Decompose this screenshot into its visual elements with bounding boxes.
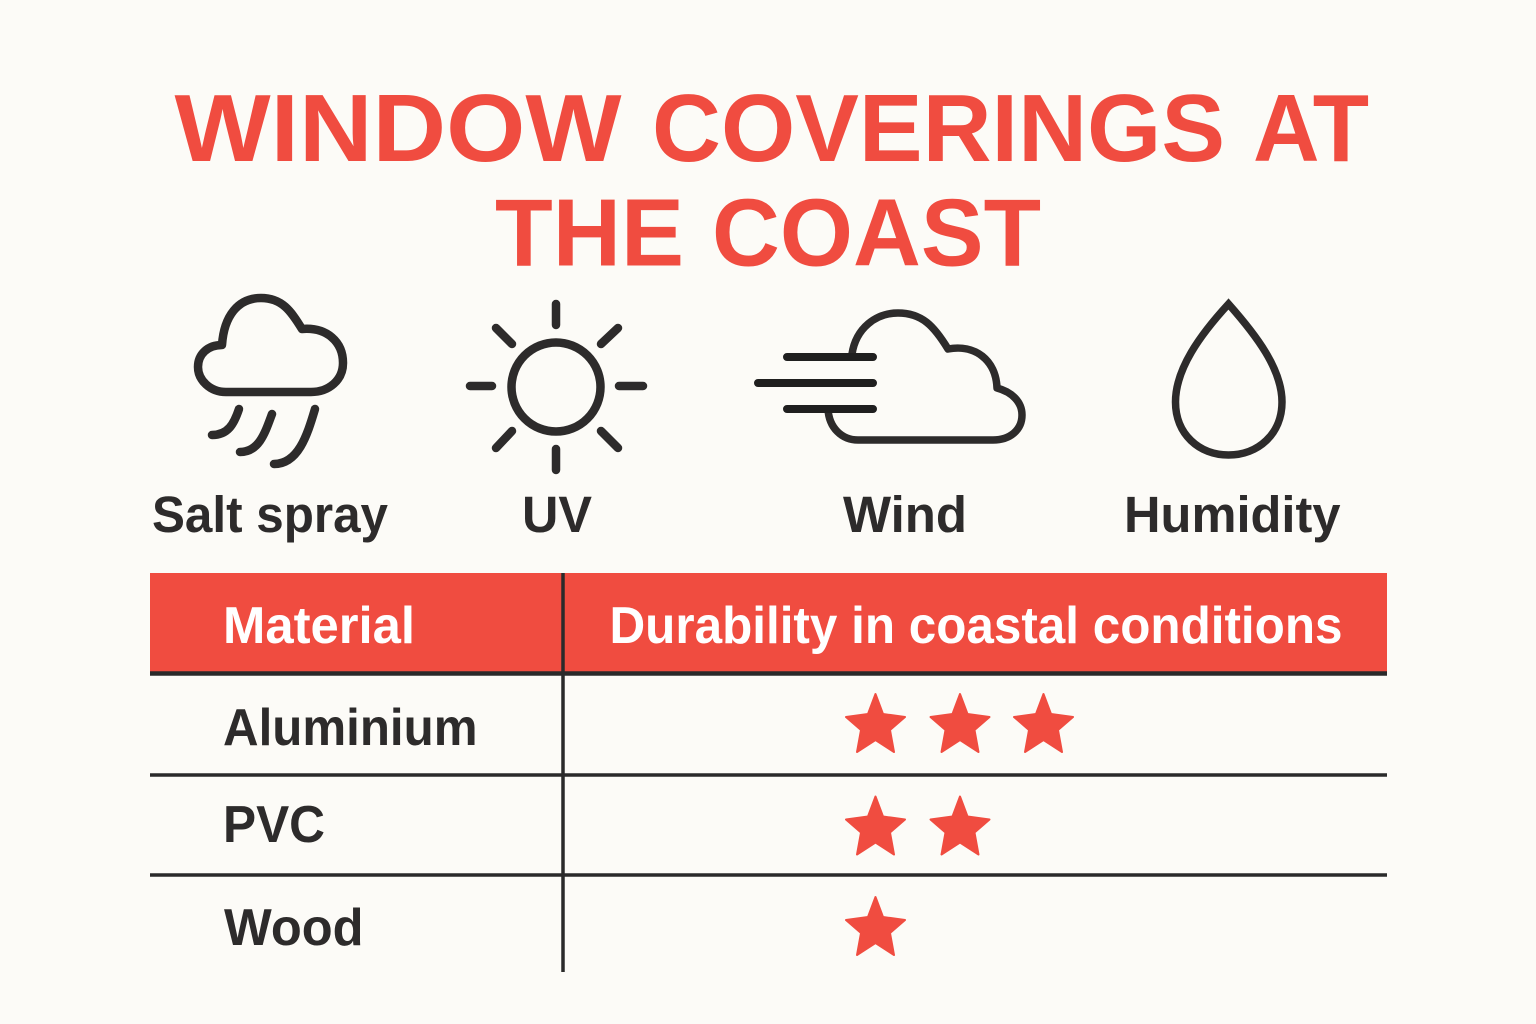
- table header: Durability in coastal conditions: [610, 597, 1342, 655]
- icon labels: Salt spray: [152, 486, 389, 543]
- icon labels: [152, 486, 1341, 543]
- table grid: [150, 573, 1387, 972]
- title: [174, 75, 1369, 286]
- row: aluminium: Aluminium: [223, 699, 478, 757]
- icon labels: UV: [522, 486, 592, 543]
- row: aluminium: [223, 694, 1073, 757]
- title: AT: [1253, 75, 1369, 182]
- icon labels: Humidity: [1124, 486, 1341, 543]
- row: wood: Wood: [224, 899, 364, 957]
- icon labels: Wind: [843, 486, 967, 543]
- icon: salt spray cloud: [198, 298, 343, 464]
- table header: Material: [223, 597, 415, 655]
- icon: wind cloud: [758, 313, 1022, 440]
- row: wood: [224, 897, 905, 957]
- row: pvc: PVC: [223, 796, 325, 854]
- row: pvc: [223, 796, 990, 854]
- icon: sun: [470, 304, 643, 470]
- title: COVERINGS: [652, 75, 1225, 182]
- table header: [150, 573, 1387, 673]
- icon: humidity drop: [1176, 304, 1282, 455]
- title: WINDOW: [174, 75, 622, 182]
- title: COAST: [712, 180, 1041, 286]
- title: THE: [495, 180, 684, 286]
